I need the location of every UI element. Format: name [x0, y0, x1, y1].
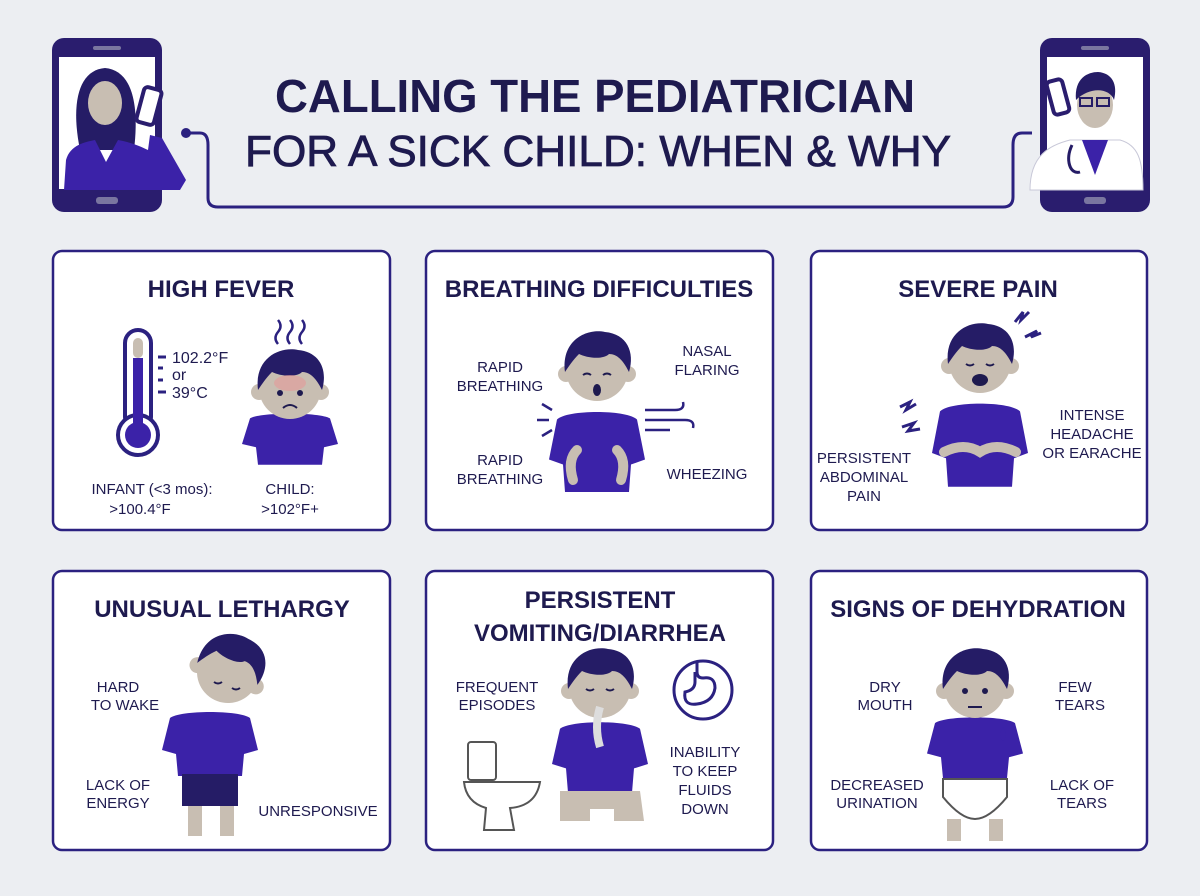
panel: signs of dehydration: MOUTH — [858, 697, 912, 714]
panel: breathing difficulties: NASAL — [682, 343, 732, 360]
panel: persistent vomiting/diarrhea: FLUIDS — [678, 782, 732, 799]
panel: persistent vomiting/diarrhea — [426, 571, 773, 850]
panel: high fever: INFANT (<3 mos): — [92, 481, 212, 498]
panel: breathing difficulties: FLARING — [674, 362, 740, 379]
panel: severe pain: SEVERE PAIN — [898, 276, 1058, 303]
panel: signs of dehydration: FEW — [1058, 679, 1093, 696]
connection wire — [186, 133, 1032, 207]
icon: child in pain — [900, 312, 1041, 487]
panel: high fever: CHILD: — [265, 481, 315, 498]
panel: severe pain: OR EARACHE — [1042, 445, 1142, 462]
icon: stomach — [674, 661, 732, 719]
phone: parent calling — [52, 38, 186, 212]
panel: high fever: 102.2°F — [172, 350, 228, 367]
panel: signs of dehydration: SIGNS OF DEHYDRATION — [830, 596, 1126, 623]
panel: unusual lethargy: ENERGY — [86, 795, 150, 812]
icon: child breathing hard — [537, 331, 693, 492]
panel: persistent vomiting/diarrhea: PERSISTENT — [525, 587, 676, 614]
panel: high fever: >100.4°F — [109, 501, 171, 518]
panel: persistent vomiting/diarrhea: INABILITY — [670, 744, 740, 761]
panel: persistent vomiting/diarrhea: TO KEEP — [673, 763, 737, 780]
panel: signs of dehydration: TEARS — [1057, 795, 1107, 812]
panel: signs of dehydration: TEARS — [1055, 697, 1105, 714]
panel: unusual lethargy — [53, 571, 390, 850]
panel: severe pain: PAIN — [847, 488, 881, 505]
panel: severe pain: INTENSE — [1059, 407, 1125, 424]
panel: breathing difficulties: RAPID — [477, 359, 523, 376]
icon: thermometer — [118, 330, 166, 455]
panel: unusual lethargy: HARD — [97, 679, 139, 696]
phone: pediatrician — [1030, 38, 1150, 212]
panel: signs of dehydration — [811, 571, 1147, 850]
panel: high fever: 39°C — [172, 385, 208, 402]
icon: tired child — [162, 622, 278, 836]
panel: persistent vomiting/diarrhea: DOWN — [681, 801, 729, 818]
panel: severe pain: ABDOMINAL — [820, 469, 908, 486]
panel: breathing difficulties: BREATHING DIFFICULTIES — [445, 276, 753, 303]
panel: signs of dehydration: DECREASED — [830, 777, 924, 794]
panel: signs of dehydration: URINATION — [836, 795, 918, 812]
panel: breathing difficulties: BREATHING — [457, 378, 543, 395]
title: CALLING THE PEDIATRICIAN — [275, 70, 915, 122]
panel: high fever — [53, 251, 390, 530]
panel: high fever: HIGH FEVER — [148, 276, 294, 303]
panel: breathing difficulties — [426, 251, 773, 530]
panel: severe pain: PERSISTENT — [817, 450, 911, 467]
title: FOR A SICK CHILD: WHEN & WHY — [245, 127, 951, 176]
panel: persistent vomiting/diarrhea: FREQUENT — [456, 679, 538, 696]
panel: breathing difficulties: WHEEZING — [667, 466, 747, 483]
panel: high fever: or — [172, 367, 187, 384]
panel: severe pain: HEADACHE — [1050, 426, 1134, 443]
panel: high fever: >102°F+ — [261, 501, 319, 518]
panel: signs of dehydration: LACK OF — [1050, 777, 1114, 794]
panel: persistent vomiting/diarrhea: EPISODES — [459, 697, 535, 714]
icon: child with diaper — [927, 648, 1023, 841]
panel: breathing difficulties: BREATHING — [457, 471, 543, 488]
icon: toilet — [464, 742, 540, 830]
panel: severe pain — [811, 251, 1147, 530]
panel: signs of dehydration: DRY — [869, 679, 901, 696]
icon: feverish child — [242, 320, 338, 465]
panel: unusual lethargy: UNRESPONSIVE — [258, 803, 378, 820]
panel: persistent vomiting/diarrhea: VOMITING/DIARRHEA — [474, 620, 726, 647]
panel: unusual lethargy: TO WAKE — [91, 697, 159, 714]
panel: unusual lethargy: LACK OF — [86, 777, 150, 794]
panel: breathing difficulties: RAPID — [477, 452, 523, 469]
icon: sick child kneeling — [552, 648, 648, 821]
panel: unusual lethargy: UNUSUAL LETHARGY — [94, 596, 350, 623]
title — [245, 70, 951, 176]
